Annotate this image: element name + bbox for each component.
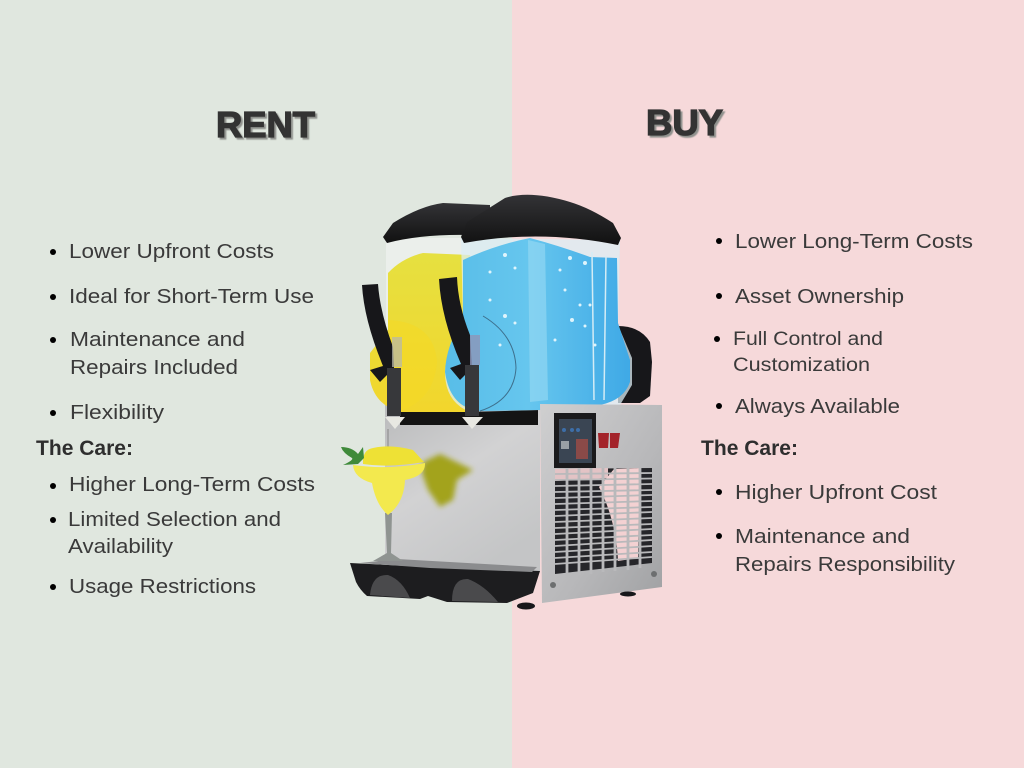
cons list: buy: Higher Upfront Cost <box>735 481 937 504</box>
cons list: rent: Limited Selection and <box>68 508 281 531</box>
mint leaf <box>341 447 364 465</box>
cons list: rent <box>50 473 315 598</box>
margarita glass <box>353 446 425 561</box>
cons list: buy <box>716 481 956 576</box>
panel: buy background <box>512 0 1024 768</box>
body front panel <box>385 404 540 572</box>
right dispenser handle and nozzle <box>439 277 483 429</box>
cons list: buy: Repairs Responsibility <box>735 553 956 576</box>
pros list: rent: Ideal for Short-Term Use <box>69 285 314 308</box>
cons list: buy: Maintenance and <box>735 525 910 548</box>
pros list: rent: Repairs Included <box>70 356 238 379</box>
dark band under tanks <box>400 404 538 425</box>
panel: buy list <box>701 230 973 576</box>
screws <box>550 571 657 588</box>
pros list: buy: Asset Ownership <box>735 285 904 308</box>
illustration: slush machine <box>341 195 662 610</box>
glass shadow on machine <box>422 454 473 507</box>
body side panel <box>540 404 662 603</box>
pros list: rent: Flexibility <box>70 401 165 424</box>
panel: rent list <box>36 240 315 598</box>
display panel <box>554 413 596 468</box>
heading: BUY: BUY <box>646 102 723 143</box>
red switches <box>598 433 620 448</box>
feet <box>517 592 636 610</box>
pros list: buy <box>714 230 973 418</box>
subheading: rent the care: The Care: <box>36 437 133 460</box>
heading: RENT: RENT <box>216 104 315 145</box>
pros list: buy: Customization <box>733 355 870 376</box>
cons list: rent: Usage Restrictions <box>69 575 256 598</box>
pros list: buy: Always Available <box>735 395 900 418</box>
pros list: buy: Lower Long-Term Costs <box>735 230 973 253</box>
cons list: rent: Higher Long-Term Costs <box>69 473 315 496</box>
right lid <box>461 195 621 245</box>
pros list: rent: Maintenance and <box>70 328 245 351</box>
pros list: rent: Lower Upfront Costs <box>69 240 274 263</box>
motor housing <box>618 326 652 403</box>
ventilation grille <box>555 468 652 576</box>
subheading: buy the care: The Care: <box>701 437 798 460</box>
pros list: rent <box>50 240 314 424</box>
right tank: blue <box>445 238 632 412</box>
left tank: yellow <box>370 238 470 412</box>
left dispenser handle and nozzle <box>362 284 405 447</box>
drip trays <box>350 559 540 603</box>
pros list: buy: Full Control and <box>733 329 883 350</box>
left lid <box>383 203 490 243</box>
cons list: rent: Availability <box>68 535 174 558</box>
panel: rent background <box>0 0 512 768</box>
